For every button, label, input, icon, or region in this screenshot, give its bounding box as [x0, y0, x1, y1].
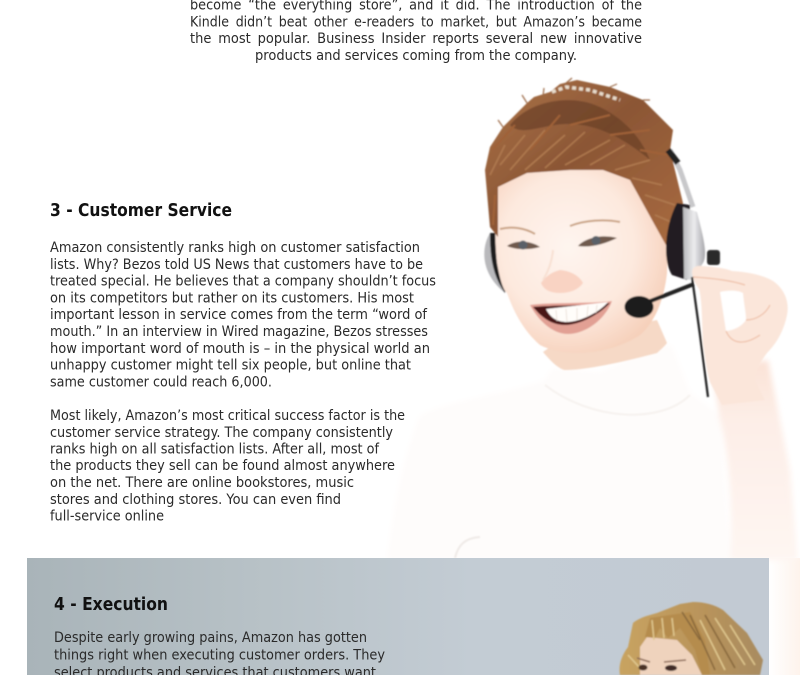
brows [500, 228, 535, 234]
paragraph: word of mouth: treated special. He believes that a company shouldn’t focus [50, 274, 436, 290]
paragraph: word of mouth: lists. Why? Bezos told US News that customers have to be [50, 257, 423, 273]
paragraph: customer service strategy: stores and clothing stores. You can even find [50, 492, 341, 508]
nose [541, 270, 583, 293]
paragraph: execution [54, 630, 385, 675]
eyes [507, 236, 617, 250]
top text block: section 2 ending: Kindle didn’t beat other e-readers to market, but Amazon’s became [190, 14, 642, 30]
paragraph: customer service strategy [50, 408, 405, 524]
microphone and wire [624, 277, 708, 397]
section 3: customer service [50, 200, 436, 524]
top text block: section 2 ending: products and services coming from the company. [255, 48, 577, 64]
photo: smiling woman with headset [387, 78, 800, 675]
left earcup [484, 233, 510, 293]
neck [543, 320, 667, 370]
mouth [530, 301, 612, 334]
hair [485, 78, 683, 247]
paragraph: execution: Despite early growing pains, Amazon has gotten [54, 630, 367, 646]
paragraph: customer service strategy: full-service online [50, 508, 164, 524]
headband [670, 150, 693, 207]
top text block: section 2 ending: the most popular. Business Insider reports several new innovative [190, 31, 642, 47]
photo: blonde woman [619, 602, 763, 675]
paragraph: word of mouth: mouth.” In an interview in Wired magazine, Bezos stresses [50, 324, 428, 340]
paragraph: word of mouth [50, 240, 436, 390]
paragraph: execution: things right when executing customer orders. They [54, 648, 385, 664]
paragraph: word of mouth: Amazon consistently ranks high on customer satisfaction [50, 240, 420, 256]
paragraph: word of mouth: how important word of mouth is – in the physical world an [50, 341, 430, 357]
face [495, 170, 668, 353]
brows and eyes [637, 658, 686, 671]
hair back [619, 602, 763, 675]
sweater folds [545, 385, 690, 415]
paragraph: customer service strategy: customer service strategy. The company consistently [50, 425, 393, 441]
panel: section 4 execution [27, 558, 769, 675]
paragraph: customer service strategy: the products they sell can be found almost anywhere [50, 458, 395, 474]
right earcup [666, 203, 720, 280]
sweater and forearm [387, 345, 798, 560]
paragraph: word of mouth: unhappy customer might tell six people, but online that [50, 358, 411, 374]
paragraph: word of mouth: important lesson in service comes from the term “word of [50, 307, 428, 323]
top text block: section 2 ending [190, 0, 642, 64]
paragraph: customer service strategy: on the net. There are online bookstores, music [50, 475, 354, 491]
heading: 3 - Customer Service: 3 - Customer Service [50, 200, 232, 221]
paragraph: word of mouth: same customer could reach 6,000. [50, 374, 272, 390]
heading: 4 - Execution: 4 - Execution [54, 594, 168, 615]
panel background [27, 558, 769, 675]
hand [692, 266, 788, 405]
paragraph: word of mouth: on its competitors but rather on its customers. His most [50, 290, 414, 306]
face [640, 637, 702, 675]
fringe [645, 612, 710, 675]
paragraph: customer service strategy: Most likely, Amazon’s most critical success factor is the [50, 408, 405, 424]
paragraph: customer service strategy: ranks high on all satisfaction lists. After all, most of [50, 442, 380, 458]
peach tint at right edge [769, 558, 800, 675]
